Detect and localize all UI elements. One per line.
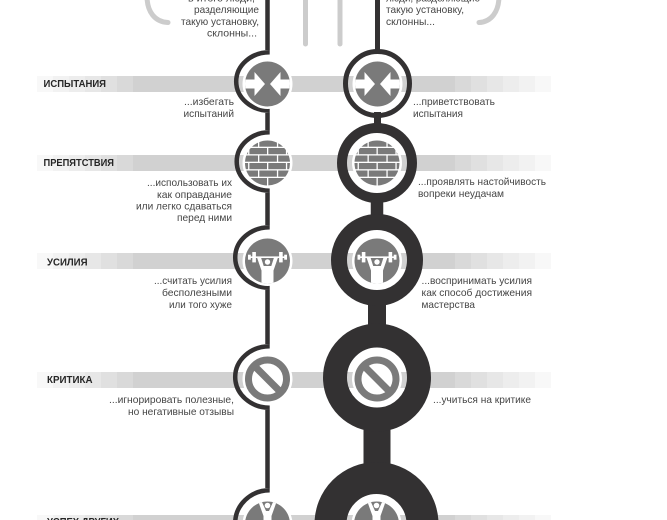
heading: испытания: ИСПЫТАНИЯ bbox=[44, 78, 106, 90]
text: воспринимать усилия: ...воспринимать усилия bbox=[422, 275, 532, 287]
text: left column intro: такую установку, bbox=[181, 16, 259, 28]
text: right column intro: склонны... bbox=[386, 16, 435, 28]
icon: weightlifter left bbox=[242, 236, 292, 286]
icon: arrows left bbox=[242, 59, 292, 109]
icon: person left bbox=[242, 502, 292, 520]
text: игнорировать отзывы: ...игнорировать полезные, bbox=[109, 394, 234, 406]
text: считать усилия бесполезными: или того хуже bbox=[169, 299, 232, 311]
decorative top curves and lines bbox=[147, 0, 499, 44]
text: игнорировать отзывы bbox=[109, 394, 234, 418]
text: right column intro bbox=[386, 0, 480, 28]
text: left column intro: разделяющие bbox=[194, 4, 259, 16]
row band: успех других bbox=[37, 515, 551, 520]
right path: line growing into thicker rings bbox=[330, 0, 422, 520]
heading: усилия: УСИЛИЯ bbox=[47, 256, 88, 268]
text: учиться на критике: ...учиться на критике bbox=[433, 394, 531, 406]
text: использовать как оправдание: перед ними bbox=[177, 212, 232, 224]
heading: критика: КРИТИКА bbox=[47, 374, 93, 386]
text: left column intro: склонны... bbox=[207, 28, 257, 40]
text: считать усилия бесполезными: ...считать усилия bbox=[154, 275, 232, 287]
left path: thin line with arcs bbox=[235, 0, 270, 520]
text: избегать испытаний: ...избегать bbox=[184, 96, 235, 108]
icon: weightlifter right bbox=[352, 236, 402, 286]
text: right column intro: такую установку, bbox=[386, 4, 464, 16]
text: приветствовать испытания bbox=[413, 96, 496, 120]
row band: испытания bbox=[37, 76, 551, 92]
icon: person right bbox=[352, 502, 402, 520]
icon: arrows right bbox=[352, 59, 402, 109]
text: игнорировать отзывы: но негативные отзывы bbox=[128, 406, 234, 418]
text: использовать как оправдание: как оправдание bbox=[157, 189, 232, 201]
text: считать усилия бесполезными bbox=[154, 275, 232, 311]
text: приветствовать испытания: ...приветствовать bbox=[413, 96, 496, 108]
heading: препятствия: ПРЕПЯТСТВИЯ bbox=[44, 157, 114, 169]
text: воспринимать усилия: мастерства bbox=[422, 299, 475, 311]
text: воспринимать усилия bbox=[422, 275, 532, 311]
text: использовать как оправдание bbox=[136, 177, 233, 224]
text: left column intro bbox=[181, 0, 259, 40]
text: использовать как оправдание: или легко сдаваться bbox=[136, 200, 232, 212]
text: избегать испытаний bbox=[184, 96, 235, 120]
text: воспринимать усилия: как способ достижения bbox=[422, 287, 532, 299]
text: проявлять настойчивость: вопреки неудачам bbox=[418, 188, 504, 200]
row band: усилия bbox=[37, 253, 551, 269]
text: считать усилия бесполезными: бесполезными bbox=[162, 287, 232, 299]
text: проявлять настойчивость bbox=[418, 176, 546, 200]
icon: prohibition sign left bbox=[242, 354, 292, 404]
text: проявлять настойчивость: ...проявлять настойчивость bbox=[418, 176, 546, 188]
icon: brick wall right bbox=[352, 138, 402, 188]
text: приветствовать испытания: испытания bbox=[413, 108, 463, 120]
row band: препятствия bbox=[37, 155, 551, 171]
text: избегать испытаний: испытаний bbox=[184, 108, 234, 120]
icon: prohibition sign right bbox=[352, 354, 402, 404]
icon: brick wall left bbox=[242, 138, 292, 188]
row band: критика bbox=[37, 372, 551, 388]
text: использовать как оправдание: ...использовать их bbox=[147, 177, 233, 189]
